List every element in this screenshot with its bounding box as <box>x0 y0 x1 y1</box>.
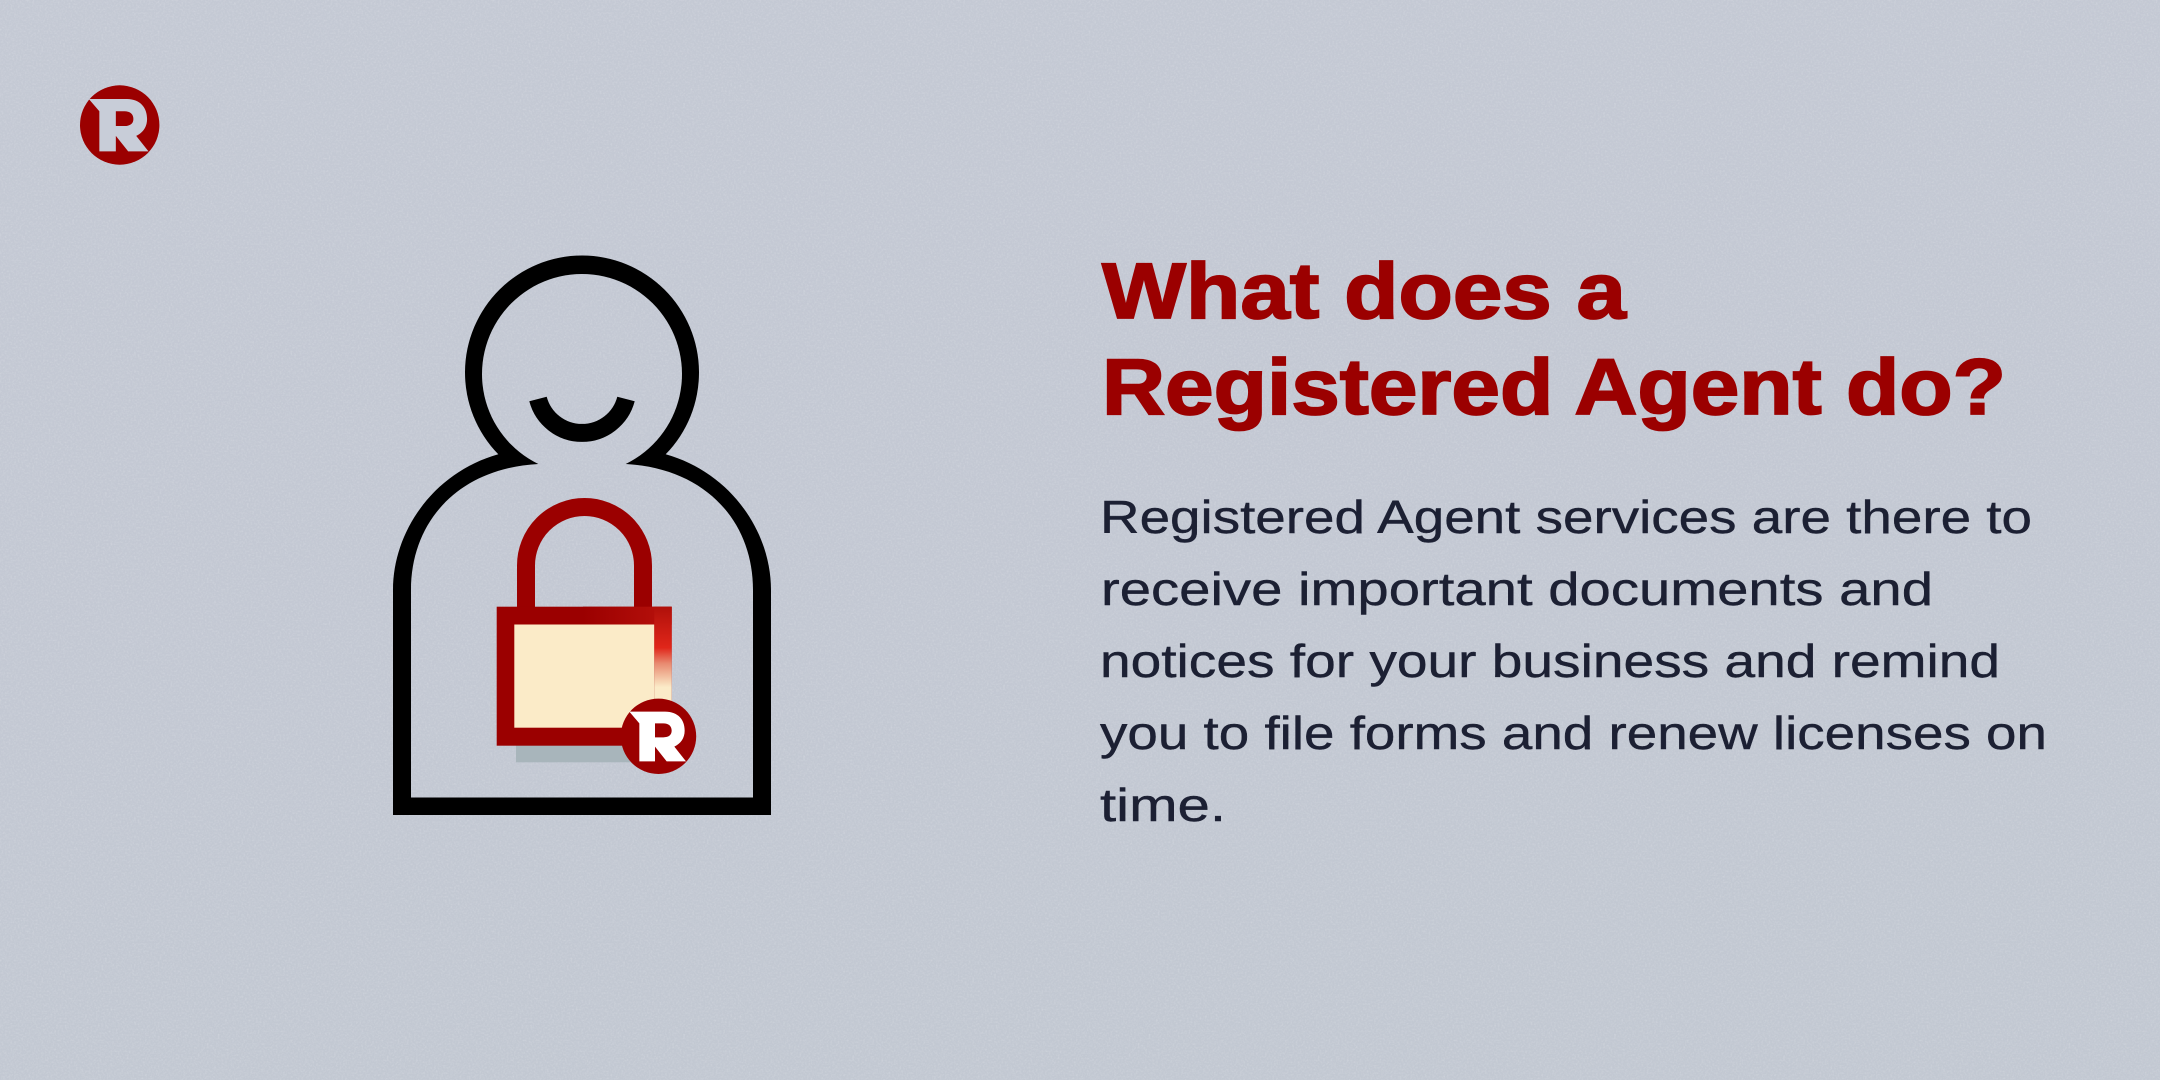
person outline <box>393 256 771 815</box>
padlock body <box>497 607 672 746</box>
heading <box>1102 246 2006 431</box>
heading: Registered Agent do? <box>1102 342 2006 431</box>
icon: brand logo <box>80 85 159 165</box>
body text <box>1100 491 2047 831</box>
body text: notices for your business and remind <box>1100 635 2000 687</box>
icon: padlock logo badge <box>621 699 696 774</box>
padlock shackle <box>526 507 643 608</box>
body text: Registered Agent services are there to <box>1100 491 2032 543</box>
body text: time. <box>1100 779 1226 831</box>
body text: receive important documents and <box>1101 563 1933 615</box>
padlock shadow <box>516 745 646 762</box>
body text: you to file forms and renew licenses on <box>1100 707 2047 759</box>
person smile <box>538 399 626 433</box>
heading: What does a <box>1102 246 1627 335</box>
icon: person with padlock <box>393 256 771 815</box>
